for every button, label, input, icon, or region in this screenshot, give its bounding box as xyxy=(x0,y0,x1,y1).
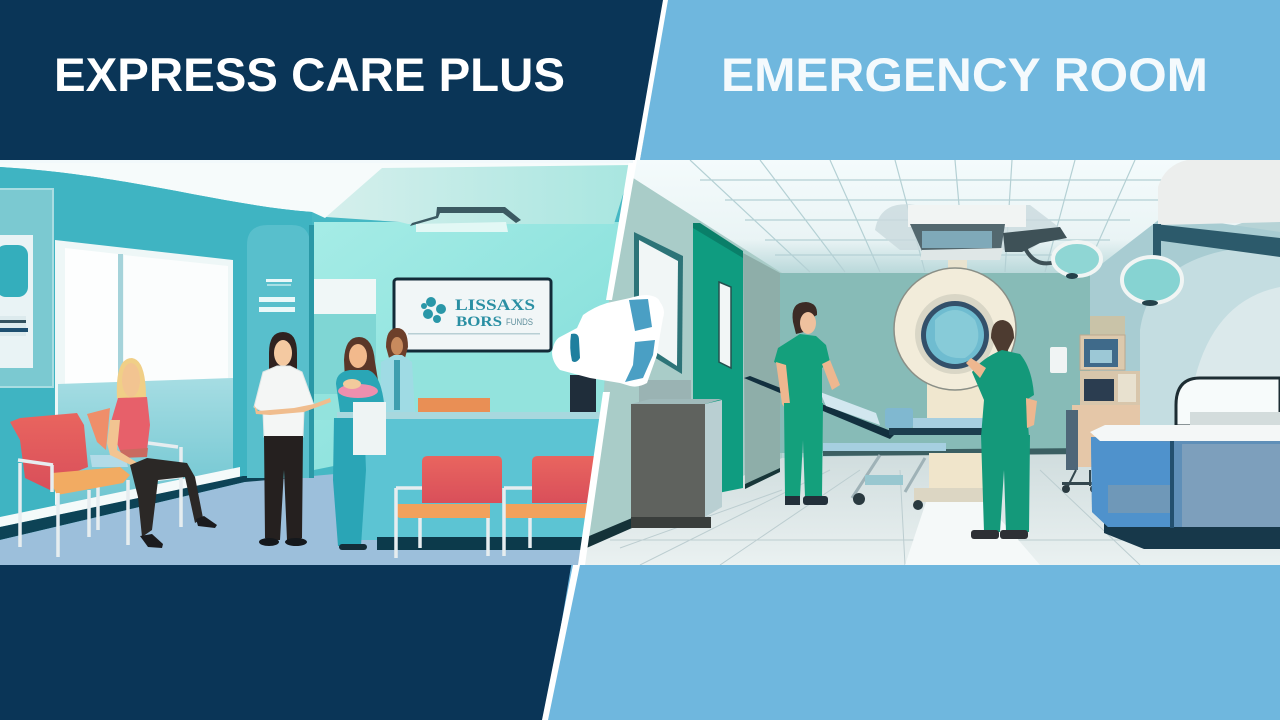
sign: clinic logo board: LISSAXS xyxy=(455,297,535,314)
ac unit xyxy=(314,279,376,314)
sign: clinic logo board xyxy=(394,279,551,351)
panel: emergency room background xyxy=(545,0,1280,720)
ceiling with tile grid xyxy=(630,160,1280,273)
icon: white and blue comparison badge xyxy=(552,295,664,387)
ct scanner xyxy=(894,254,1016,420)
sign: clinic logo board: FUNDS xyxy=(506,317,533,327)
desk cloth xyxy=(353,402,386,455)
column xyxy=(247,225,314,478)
floor xyxy=(575,450,1280,565)
reception person: nurse skirt and shoes xyxy=(333,418,367,550)
back wall xyxy=(780,273,1090,453)
reception desk xyxy=(337,375,607,550)
back wall xyxy=(314,222,640,470)
left wall xyxy=(580,176,782,548)
medical equipment tower xyxy=(1050,316,1140,493)
cabinet xyxy=(631,380,722,528)
framed wall picture xyxy=(634,232,683,374)
surgical light: right xyxy=(1122,224,1280,306)
heading: express care plus: EXPRESS CARE PLUS xyxy=(54,48,565,101)
window xyxy=(55,240,233,508)
reception person: nurse upper body with baby xyxy=(336,337,385,412)
divider: diagonal white stripe bottom xyxy=(542,565,580,720)
divider: diagonal white stripe middle xyxy=(606,160,637,300)
waiting chair: front right xyxy=(504,456,596,556)
ceiling light xyxy=(410,207,521,232)
ceiling bulkhead xyxy=(1158,160,1280,225)
heading: emergency room: EMERGENCY ROOM xyxy=(721,48,1208,101)
baseboard left xyxy=(588,518,632,548)
waiting chair: left xyxy=(10,413,130,557)
panel: clinic waiting room illustration xyxy=(0,160,640,565)
panel: express care plus background xyxy=(0,0,667,720)
standing staff member xyxy=(254,332,331,546)
baseboard xyxy=(0,467,240,527)
divider: diagonal white stripe top xyxy=(635,0,668,160)
floor xyxy=(0,474,640,565)
green door xyxy=(693,223,780,498)
overhead monitor unit xyxy=(908,205,1026,260)
scene top edge line xyxy=(0,160,633,163)
divider: diagonal white stripe lower xyxy=(578,392,610,565)
recessed ceiling xyxy=(326,165,632,224)
sign: clinic logo board: BORS xyxy=(456,314,502,330)
medic in green scrubs: right xyxy=(966,320,1037,539)
medic in green scrubs: left xyxy=(774,302,840,505)
reception person: right xyxy=(380,328,415,412)
stretcher xyxy=(744,376,985,510)
wall poster xyxy=(0,189,53,387)
panel: emergency room illustration xyxy=(575,160,1280,565)
seated patient xyxy=(107,358,217,548)
ceiling xyxy=(0,162,640,218)
left wall xyxy=(0,167,312,212)
waiting chair: front left xyxy=(396,456,502,558)
exam bed with headboard xyxy=(1090,378,1280,549)
seated back chair xyxy=(87,408,183,537)
surgical light: left xyxy=(1003,227,1101,279)
right wall xyxy=(1090,220,1280,371)
